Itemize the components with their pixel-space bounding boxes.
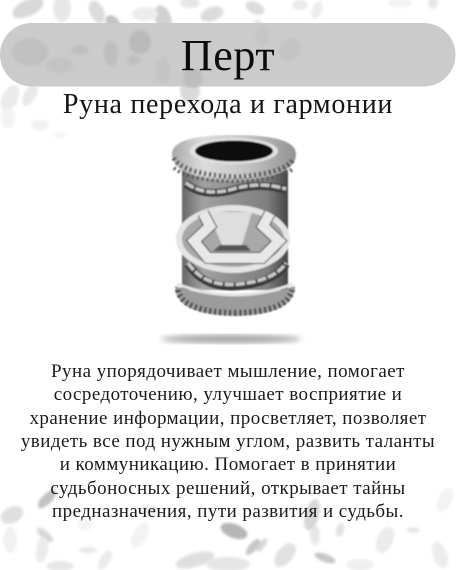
bead body bbox=[182, 170, 288, 290]
body text: и коммуникацию. Помогает в принятии bbox=[60, 454, 396, 475]
rune oval bbox=[176, 205, 290, 273]
bottom rim bbox=[175, 284, 295, 316]
rune glyph bbox=[194, 213, 279, 258]
top rim bbox=[172, 135, 296, 181]
bead shadow bbox=[161, 334, 301, 344]
body text: Руна упорядочивает мышление, помогает bbox=[51, 361, 405, 382]
body text: увидеть все под нужным углом, развить таланты bbox=[21, 431, 435, 452]
subtitle: Руна перехода и гармонии bbox=[63, 89, 393, 120]
body text: предназначения, пути развития и судьбы. bbox=[52, 501, 404, 522]
upper braid band bbox=[186, 183, 286, 287]
dark trapezoid bbox=[213, 245, 251, 251]
body text bbox=[21, 361, 435, 522]
title: Перт bbox=[181, 31, 275, 80]
body text: судьбоносных решений, открывает тайны bbox=[50, 478, 406, 499]
body text: хранение информации, просветляет, позволяет bbox=[29, 408, 427, 429]
body text: сосредоточению, улучшает восприятие и bbox=[54, 384, 402, 405]
goblet centre bbox=[208, 212, 252, 245]
